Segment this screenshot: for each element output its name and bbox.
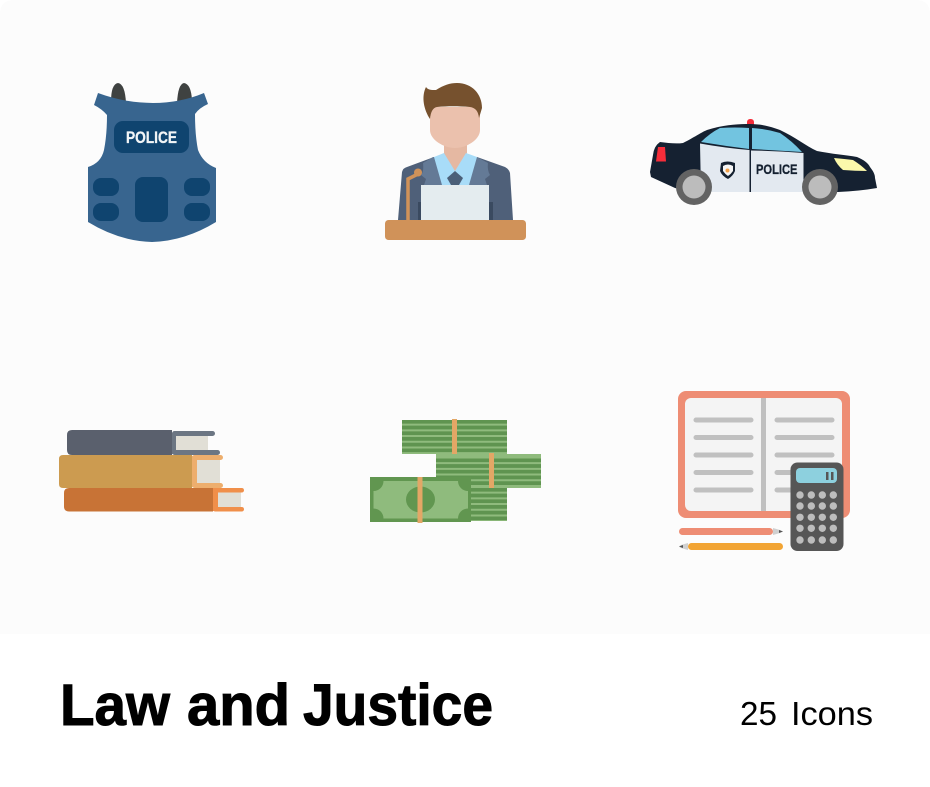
icon: open book with calculator and pencils: [678, 391, 850, 551]
icon: stacked books: [59, 430, 244, 512]
icon: money stacks: [370, 419, 541, 523]
title: Justice: [303, 673, 493, 738]
icon: police vest: POLICE: [126, 129, 177, 147]
icon: police vest: [88, 83, 216, 242]
title: Law: [60, 673, 171, 738]
icon: speaker at podium: [385, 83, 526, 240]
icon count label: 25: [740, 695, 777, 732]
icon: police car: [650, 119, 877, 205]
title: [60, 673, 493, 738]
icon: police car: POLICE: [756, 161, 798, 177]
title: and: [187, 673, 290, 738]
icon count label: Icons: [791, 695, 873, 732]
icon count label: [740, 695, 873, 732]
